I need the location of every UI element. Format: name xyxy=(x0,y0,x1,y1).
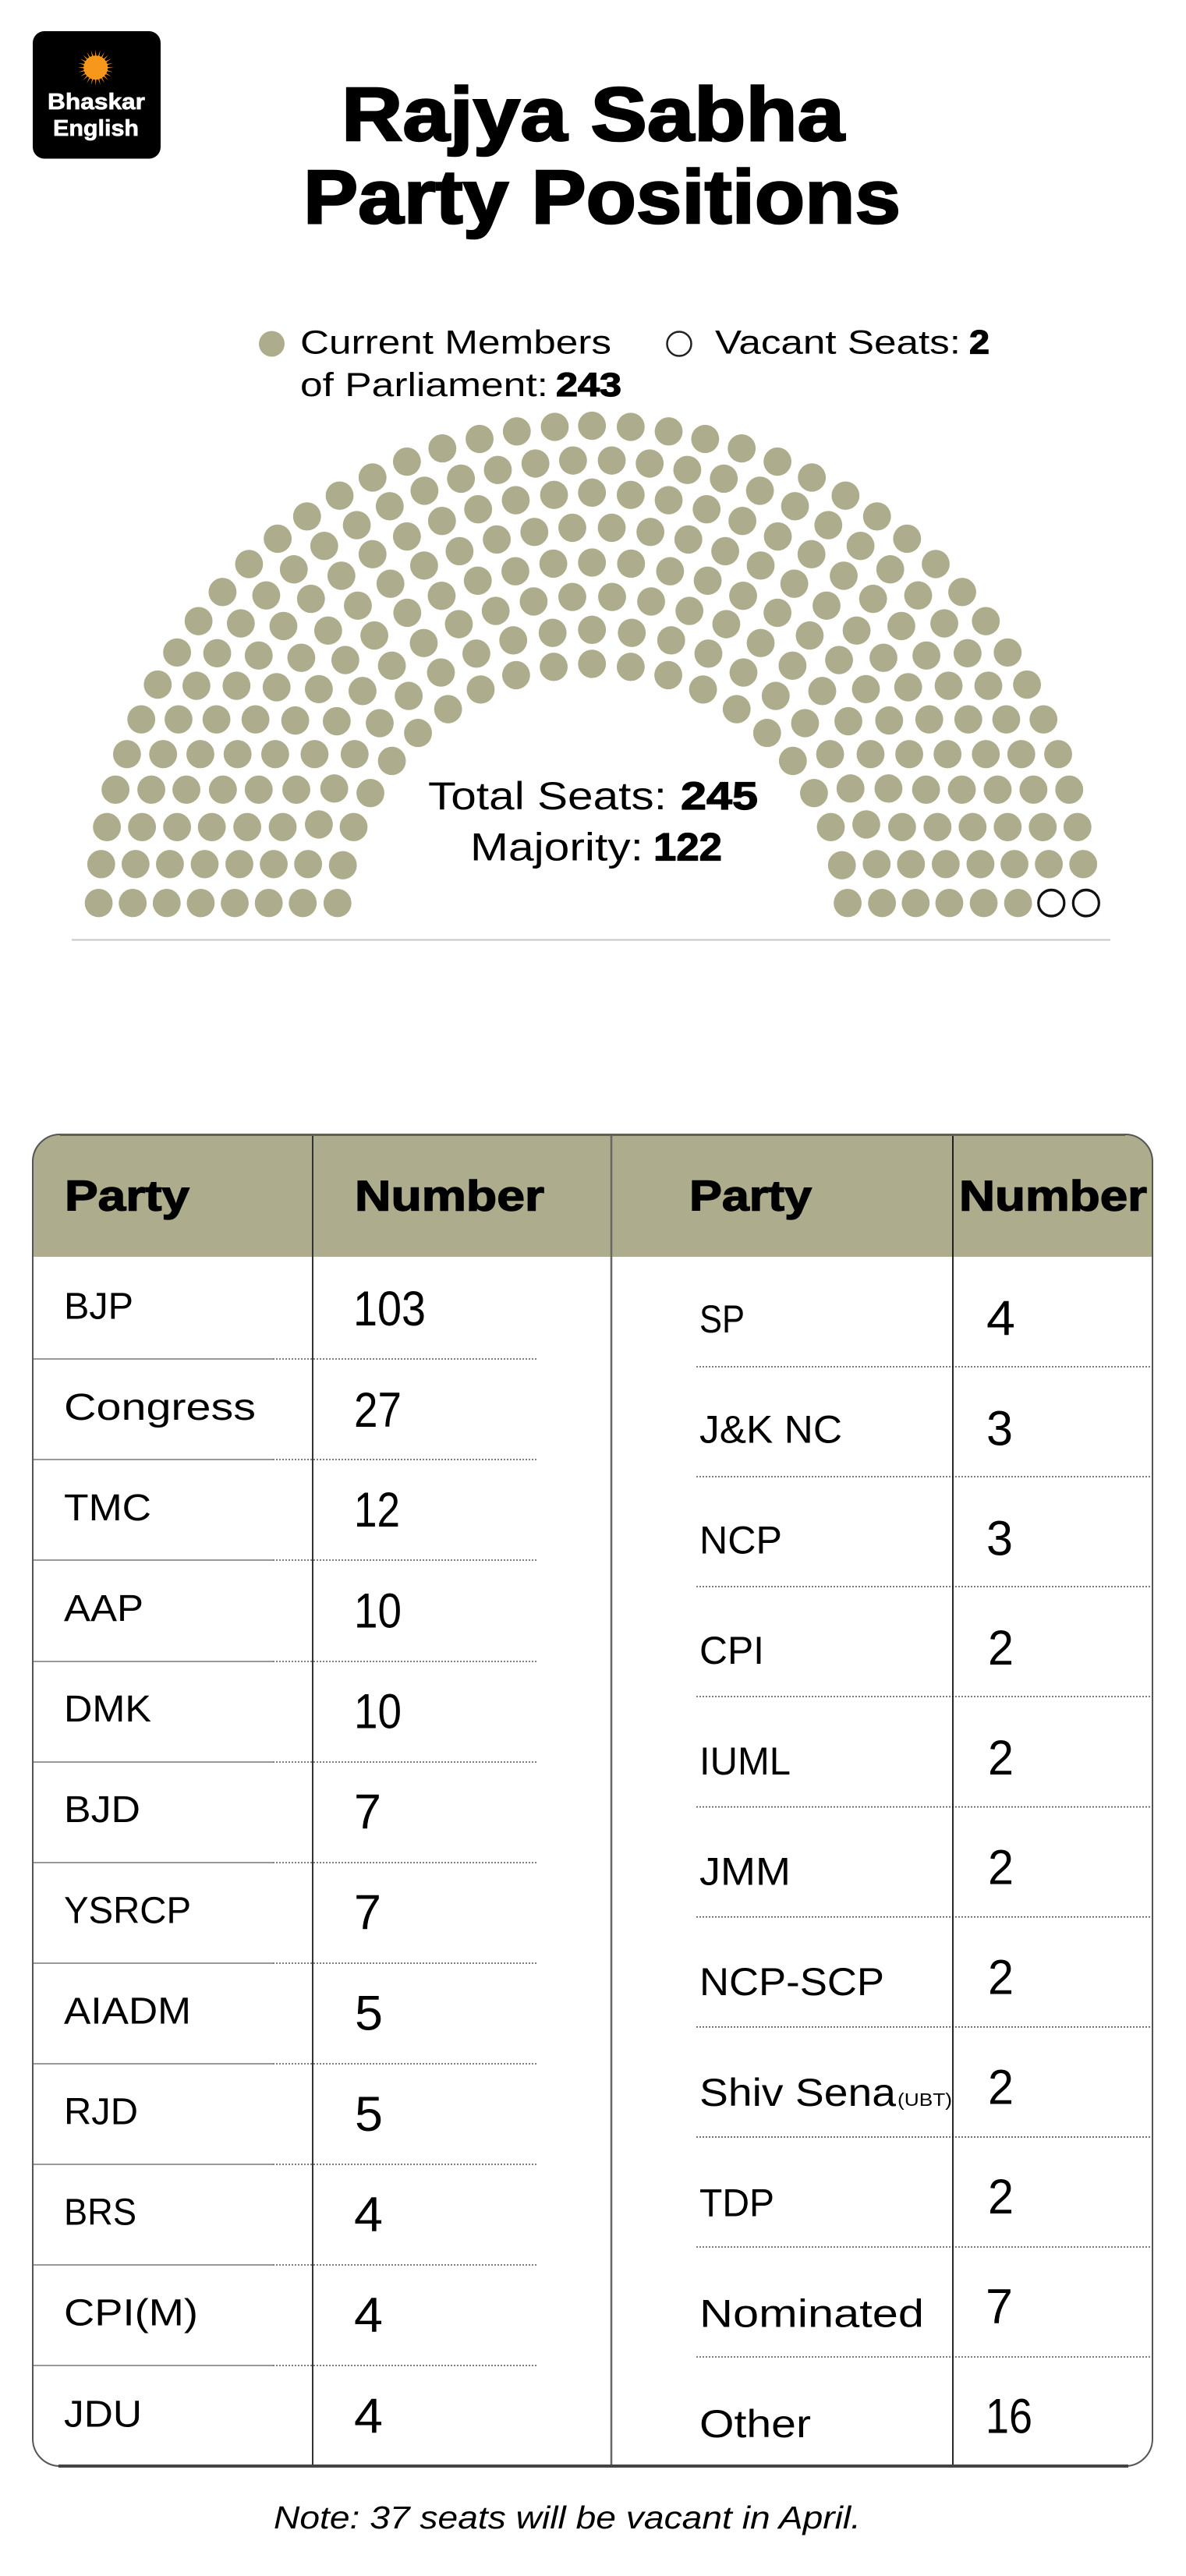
row: NCP-SCP: 2 xyxy=(988,1951,1014,2005)
title: Rajya Sabha xyxy=(342,72,845,157)
logo: Bhaskar English: Bhaskar xyxy=(48,90,145,115)
legend: current members: 243 xyxy=(556,366,621,404)
logo: Bhaskar English: English xyxy=(53,116,139,141)
center label: total seats and majority xyxy=(428,774,758,869)
row: Nominated xyxy=(696,2280,1152,2357)
center label: total seats and majority: Total Seats: xyxy=(428,774,667,818)
row: CPI(M): 4 xyxy=(354,2288,383,2343)
row: AIADM xyxy=(33,1987,536,2064)
row: Other xyxy=(699,2390,1032,2446)
row: CPI: 2 xyxy=(988,1621,1014,1675)
row: NCP xyxy=(696,1511,1152,1587)
header labels: Number xyxy=(355,1172,544,1220)
row: BJD xyxy=(33,1785,536,1863)
row: TDP xyxy=(696,2170,1152,2247)
row: YSRCP xyxy=(33,1886,536,1963)
seats: vacant xyxy=(1039,890,1099,916)
row: Other: Other xyxy=(699,2402,811,2446)
row: JDU xyxy=(64,2389,383,2443)
row: Shiv Sena (UBT) xyxy=(696,2060,1152,2137)
row: Congress: 27 xyxy=(354,1383,402,1438)
row: Congress xyxy=(33,1383,536,1460)
row: J&K NC: 3 xyxy=(986,1402,1013,1456)
right column rows xyxy=(696,1292,1152,2446)
header labels: Number xyxy=(959,1172,1147,1220)
center label: total seats and majority: 122 xyxy=(653,825,722,869)
row: CPI xyxy=(696,1621,1152,1697)
logo: Bhaskar English xyxy=(33,31,161,159)
title: Party Positions xyxy=(303,154,901,239)
row: Nominated: 7 xyxy=(986,2280,1013,2334)
row: Congress: Congress xyxy=(64,1387,256,1428)
row: RJD: 5 xyxy=(355,2087,383,2142)
row: AIADM: AIADM xyxy=(64,1990,191,2032)
center label: total seats and majority: 245 xyxy=(681,774,758,818)
title xyxy=(303,72,901,239)
row: Nominated: Nominated xyxy=(699,2291,924,2335)
legend: vacant seats: Vacant Seats: xyxy=(715,324,961,362)
row: SP: 4 xyxy=(986,1292,1015,1346)
legend: vacant seats: 2 xyxy=(969,324,990,362)
header labels: Party xyxy=(689,1172,812,1220)
row: AAP: 10 xyxy=(354,1583,402,1638)
row: TMC xyxy=(33,1483,536,1560)
row: J&K NC xyxy=(696,1402,1152,1477)
hemicycle seat chart xyxy=(85,412,1099,917)
row: CPI(M): CPI(M) xyxy=(64,2293,198,2334)
row: DMK xyxy=(33,1684,536,1762)
row: Other: 16 xyxy=(986,2390,1032,2444)
row: AAP: AAP xyxy=(64,1588,143,1629)
row: J&K NC: J&K NC xyxy=(699,1408,842,1452)
row: TDP: 2 xyxy=(988,2170,1014,2224)
header labels: Party xyxy=(65,1172,189,1220)
row: DMK: DMK xyxy=(64,1689,151,1730)
table header band xyxy=(33,1134,1152,1257)
row: RJD xyxy=(33,2087,536,2164)
legend: current members xyxy=(259,324,621,404)
row: BJP xyxy=(33,1282,536,1359)
row: AIADM: 5 xyxy=(355,1987,383,2041)
icon: orange sunburst xyxy=(78,50,114,86)
row: JDU: 4 xyxy=(354,2389,383,2443)
row: JMM: JMM xyxy=(699,1849,791,1893)
row: SP: SP xyxy=(699,1297,745,1341)
header labels xyxy=(65,1172,1147,1220)
row: JMM: 2 xyxy=(988,1841,1014,1895)
row: YSRCP: 7 xyxy=(354,1886,381,1941)
left column rows xyxy=(33,1282,536,2443)
party table xyxy=(33,1134,1152,2468)
row: JMM xyxy=(696,1841,1152,1917)
row: BJD: 7 xyxy=(354,1785,381,1840)
row: IUML xyxy=(696,1731,1152,1807)
row: IUML: 2 xyxy=(988,1731,1014,1785)
row: NCP-SCP: NCP-SCP xyxy=(699,1960,884,2004)
row: TMC: TMC xyxy=(64,1488,151,1529)
legend: current members: Current Members xyxy=(300,324,611,362)
legend: current members: of Parliament: xyxy=(300,366,548,404)
row: BJP: BJP xyxy=(64,1286,133,1328)
seats: left half xyxy=(85,412,606,917)
column rules and frame xyxy=(33,1134,1152,2468)
row: TDP: TDP xyxy=(699,2181,774,2225)
row: DMK: 10 xyxy=(354,1684,402,1739)
footnote: Note: 37 seats will be vacant in April. xyxy=(274,2500,861,2535)
row: SP xyxy=(696,1292,1152,1367)
row: BJP: 103 xyxy=(353,1282,426,1336)
row: RJD: RJD xyxy=(64,2091,138,2133)
row: BRS: 4 xyxy=(354,2188,383,2242)
row: BJD: BJD xyxy=(64,1789,140,1831)
row: Shiv Sena (UBT): Shiv Sena xyxy=(699,2071,896,2114)
row: AAP xyxy=(33,1583,536,1661)
row: NCP: 3 xyxy=(986,1511,1013,1566)
seats: right half xyxy=(598,412,1097,917)
row: CPI(M) xyxy=(33,2288,536,2365)
row: CPI: CPI xyxy=(699,1629,764,1672)
chart baseline xyxy=(72,939,1110,940)
row: TMC: 12 xyxy=(354,1483,400,1537)
row: IUML: IUML xyxy=(699,1739,791,1783)
row: NCP: NCP xyxy=(699,1518,782,1562)
row: BRS xyxy=(33,2188,536,2265)
row: YSRCP: YSRCP xyxy=(64,1890,191,1931)
legend: vacant seats xyxy=(667,324,990,362)
row: BRS: BRS xyxy=(64,2192,136,2234)
row: Shiv Sena (UBT): 2 xyxy=(988,2060,1014,2114)
row: Shiv Sena (UBT): (UBT) xyxy=(897,2089,952,2110)
center label: total seats and majority: Majority: xyxy=(470,825,643,869)
row: JDU: JDU xyxy=(64,2394,142,2436)
row: NCP-SCP xyxy=(696,1951,1152,2027)
